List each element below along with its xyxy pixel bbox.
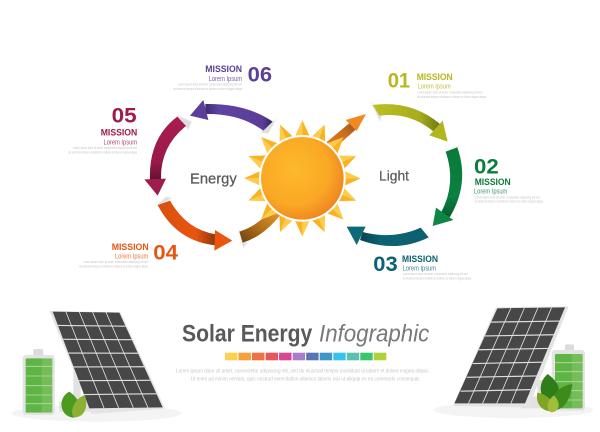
text block: mission 02 bbox=[474, 155, 543, 204]
text block: mission 02: Lorem Ipsum bbox=[474, 187, 507, 196]
text block: mission 04: Lorem ipsum dolor sit amet, consectetur adipiscing elit sed bbox=[83, 260, 148, 264]
battery bbox=[23, 349, 55, 415]
text block: mission 04 bbox=[79, 241, 178, 268]
arrow: orange ray leaving sun bbox=[326, 114, 366, 149]
text block: mission 06: Lorem ipsum dolor sit amet, consectetur adipiscing elit sed bbox=[178, 82, 242, 86]
label: Light: Light bbox=[379, 168, 409, 184]
text block: mission 05: do eiusmod tempor incididunt ut labore et dolore magna aliqua bbox=[68, 150, 137, 154]
arrow: step 03 teal bbox=[347, 227, 429, 246]
text block: mission 05: Lorem ipsum dolor sit amet, consectetur adipiscing elit sed bbox=[73, 146, 137, 150]
arrow: brown link into sun bbox=[239, 207, 282, 243]
text block: mission 04: 04 bbox=[153, 241, 178, 264]
text block: mission 03: Lorem Ipsum bbox=[403, 263, 436, 272]
text block: mission 03 bbox=[373, 253, 471, 280]
text block: mission 02: Lorem ipsum dolor sit amet, consectetur adipiscing elit sed bbox=[475, 196, 540, 200]
colour strip bbox=[225, 353, 386, 360]
text block: description: Ut enim ad minim veniam, quis nostrud exercitation ullamco laboris nisi ut aliquip ex ea commodo consequat. bbox=[191, 377, 420, 383]
text block: mission 01: 01 bbox=[388, 69, 411, 92]
panel: Energy cycle arrows bbox=[144, 100, 282, 251]
stand bbox=[59, 367, 93, 412]
text block: mission 06: do eiusmod tempor incididunt ut labore et dolore magna aliqua bbox=[173, 87, 242, 91]
text block: mission 02: do eiusmod tempor incididunt ut labore et dolore magna aliqua bbox=[475, 200, 543, 204]
illustration: left solar panel and battery bbox=[12, 311, 182, 422]
text block: mission 04: do eiusmod tempor incididunt ut labore et dolore magna aliqua bbox=[79, 264, 148, 268]
text block: mission 02: 02 bbox=[474, 155, 499, 178]
text block: description bbox=[176, 368, 429, 383]
icon: leaves bbox=[537, 374, 572, 412]
text block: mission 05: Lorem Ipsum bbox=[104, 137, 137, 146]
solar panel bbox=[49, 311, 165, 414]
text block: description: Lorem ipsum dolor sit amet, consectetur adipiscing elit, sed do eiusmod tempor incididunt ut labore et dolore magna aliqua. bbox=[176, 368, 429, 374]
arrow: step 02 green bbox=[433, 147, 462, 226]
text block: mission 06: 06 bbox=[248, 64, 272, 87]
solar panel bbox=[453, 306, 569, 407]
arrow: step 05 crimson bbox=[144, 117, 186, 196]
title: Solar Energy bbox=[182, 321, 313, 348]
illustration: right solar panel and battery bbox=[433, 306, 593, 418]
text block: mission 03: MISSION bbox=[402, 254, 438, 265]
text block: mission 06: MISSION bbox=[205, 64, 242, 75]
text block: mission 02: MISSION bbox=[475, 177, 511, 188]
text block: mission 03: Lorem ipsum dolor sit amet, consectetur adipiscing elit sed bbox=[403, 272, 468, 276]
text block: mission 05 bbox=[68, 105, 137, 154]
text block: mission 03: 03 bbox=[373, 253, 398, 276]
text block: mission 04: MISSION bbox=[112, 242, 149, 253]
title: Infographic bbox=[319, 321, 429, 348]
text block: mission 01 bbox=[388, 69, 486, 99]
arrow: step 06 purple bbox=[190, 100, 273, 131]
text block: mission 01: do eiusmod tempor incididunt ut labore et dolore magna aliqua bbox=[417, 95, 486, 99]
battery bbox=[552, 344, 585, 411]
icon: sun bbox=[244, 120, 361, 237]
arrow: step 01 olive bbox=[373, 104, 448, 142]
text block: mission 01: MISSION bbox=[417, 72, 453, 83]
text block: mission 03: do eiusmod tempor incididunt ut labore et dolore magna aliqua bbox=[403, 276, 471, 280]
text block: mission 06: Lorem Ipsum bbox=[209, 74, 242, 83]
text block: mission 04: Lorem Ipsum bbox=[115, 252, 148, 261]
text block: mission 06 bbox=[173, 64, 272, 91]
stand bbox=[520, 380, 550, 408]
title bbox=[182, 321, 429, 348]
icon: leaves bbox=[61, 392, 86, 418]
arrow: step 04 orange bbox=[158, 201, 232, 251]
text block: mission 01: Lorem ipsum dolor sit amet, consectetur adipiscing elit sed bbox=[417, 90, 482, 94]
text block: mission 01: Lorem Ipsum bbox=[418, 81, 451, 90]
label: Energy: Energy bbox=[190, 170, 237, 187]
text block: mission 05: MISSION bbox=[101, 128, 137, 139]
text block: mission 05: 05 bbox=[112, 105, 137, 128]
panel: Light cycle arrows bbox=[326, 101, 462, 246]
